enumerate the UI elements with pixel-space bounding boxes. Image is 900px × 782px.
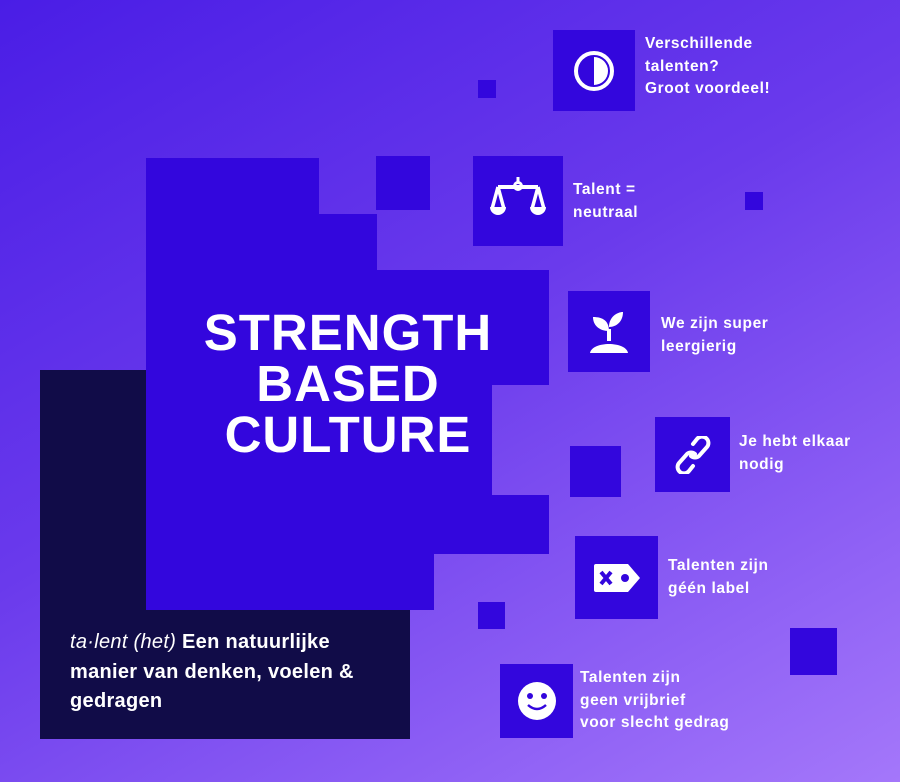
icon: scales: [473, 156, 563, 246]
icon: contrast circle: [553, 30, 635, 111]
text: leergierig: We zijn super: [661, 315, 768, 332]
text: geen label: Talenten zijn: [668, 557, 769, 574]
text: leergierig: leergierig: [661, 338, 737, 354]
panel: definition box: [40, 370, 410, 739]
text: geen vrijbrief: Talenten zijn: [580, 669, 681, 686]
text: geen label: géén label: [668, 580, 750, 596]
icon: link: [655, 417, 730, 492]
text: elkaar nodig: [739, 433, 851, 472]
text: elkaar nodig: Je hebt elkaar: [739, 433, 851, 450]
text: geen vrijbrief: voor slecht gedrag: [580, 714, 729, 731]
icon: plant: [568, 291, 650, 372]
text: verschillende talenten: talenten?: [645, 58, 719, 74]
text: geen label: [668, 557, 769, 596]
text: elkaar nodig: nodig: [739, 456, 784, 472]
title: STRENGTH: [204, 304, 492, 361]
text: leergierig: [661, 315, 768, 354]
text: talent neutraal: neutraal: [573, 204, 638, 220]
text: verschillende talenten: Verschillende: [645, 35, 753, 52]
icon: smiley: [500, 664, 573, 738]
title: CULTURE: [225, 406, 471, 463]
definition text: ta·lent (het) Een natuurlijke manier van denken, voelen & gedragen: [70, 631, 354, 712]
title: BASED: [256, 355, 440, 412]
text: geen vrijbrief: [580, 669, 729, 731]
text: verschillende talenten: [645, 35, 770, 97]
text: verschillende talenten: Groot voordeel!: [645, 80, 770, 97]
title: [204, 304, 492, 463]
text: talent neutraal: Talent =: [573, 181, 636, 198]
text: talent neutraal: [573, 181, 638, 220]
icon: tag: [575, 536, 658, 619]
text: geen vrijbrief: geen vrijbrief: [580, 692, 686, 708]
